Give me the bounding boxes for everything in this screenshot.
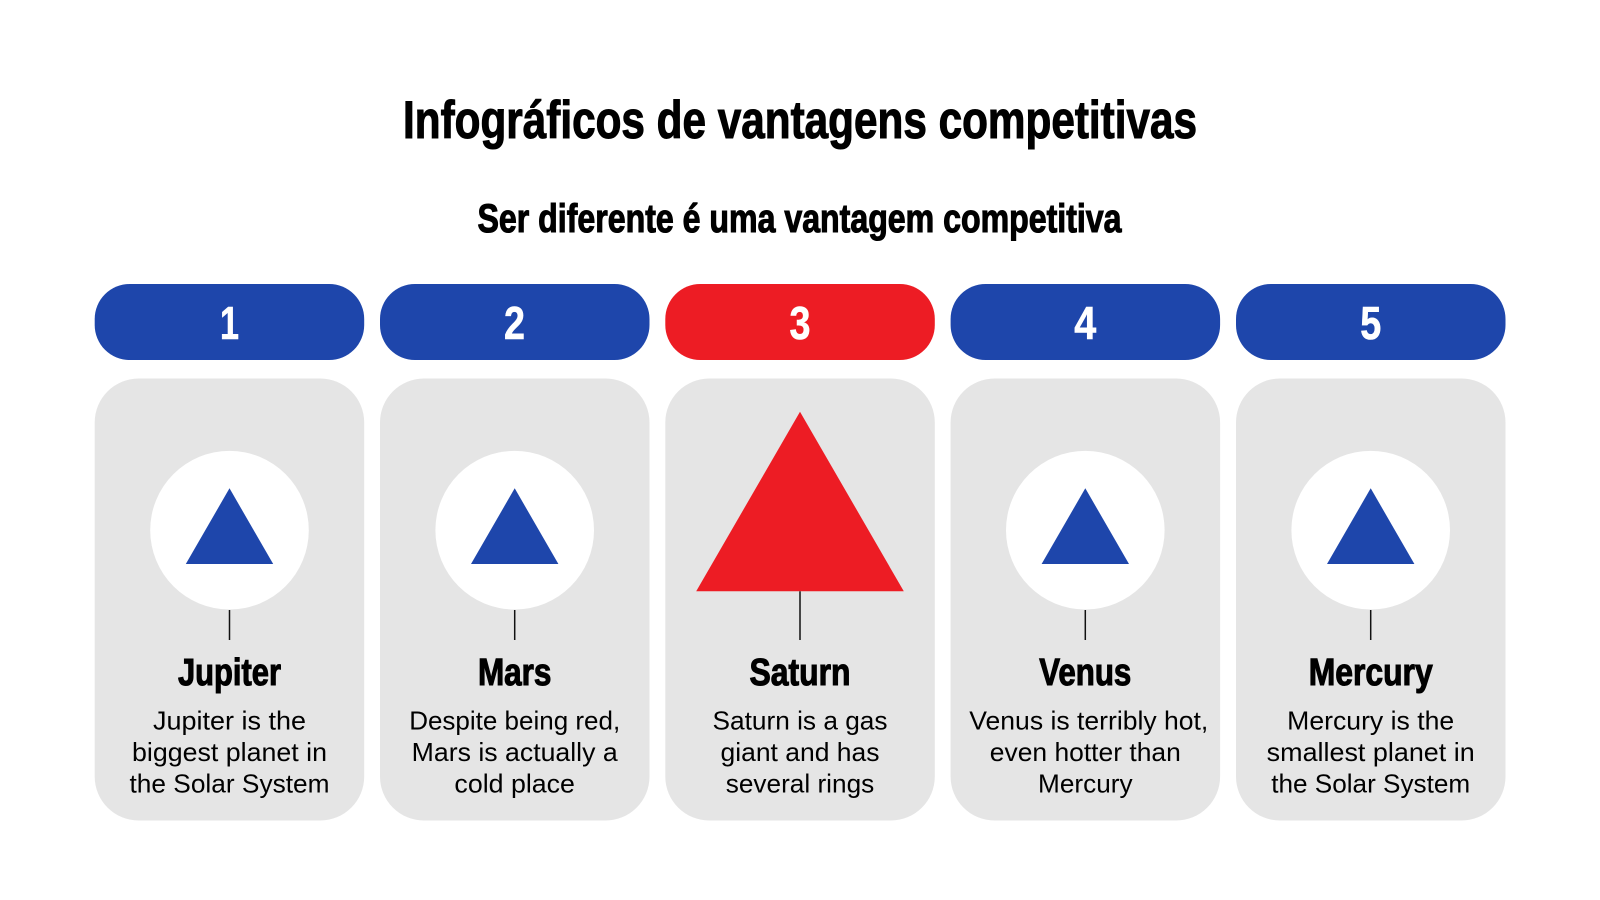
text: Mars description: cold place [454, 769, 575, 799]
number pill 1: 1 [220, 297, 239, 349]
text: Mercury description [1267, 705, 1475, 799]
panel: Mercury [1236, 378, 1506, 820]
number pill 2 [380, 284, 650, 360]
number pill 3: 3 [790, 297, 810, 349]
text: Venus description: Venus is terribly hot, [969, 705, 1208, 735]
subtitle: Ser diferente é uma vantagem competitiva [478, 197, 1122, 241]
text: Mercury description: the Solar System [1271, 769, 1470, 799]
number pill 3 [665, 284, 935, 360]
text: Venus description [969, 705, 1208, 799]
number pill 1 [95, 284, 364, 360]
number pill 2: 2 [504, 297, 525, 349]
text: Saturn description [712, 705, 888, 799]
text: Mars description: Mars is actually a [412, 737, 618, 767]
icon: blue triangle in circle [1291, 451, 1450, 610]
panel: Mars [380, 378, 650, 820]
number pill 4 [951, 284, 1220, 360]
number pill 5 [1236, 284, 1506, 360]
text: Saturn description: several rings [726, 769, 874, 799]
text: Saturn description: giant and has [720, 737, 880, 767]
text: Jupiter description: Jupiter is the [153, 705, 306, 735]
text: Saturn description: Saturn is a gas [712, 705, 888, 735]
heading: Saturn: Saturn [750, 652, 850, 694]
heading: Venus: Venus [1039, 652, 1131, 694]
panel: Jupiter [95, 378, 364, 820]
panel: Venus [951, 378, 1220, 820]
text: Jupiter description [130, 705, 330, 799]
title: Infográficos de vantagens competitivas [403, 91, 1197, 150]
text: Mars description: Despite being red, [409, 705, 620, 735]
panel: Saturn (highlighted) [665, 378, 935, 820]
text: Jupiter description: biggest planet in [132, 737, 327, 767]
icon: large red triangle [696, 412, 904, 591]
text: Venus description: even hotter than [990, 737, 1181, 767]
icon: blue triangle in circle [150, 451, 309, 610]
heading: Mercury: Mercury [1309, 652, 1433, 694]
text: Mars description [409, 705, 620, 799]
text: Jupiter description: the Solar System [130, 769, 330, 799]
number pill 5: 5 [1360, 297, 1381, 349]
heading: Mars: Mars [478, 652, 551, 694]
heading: Jupiter: Jupiter [178, 652, 281, 694]
icon: blue triangle in circle [1006, 451, 1165, 610]
text: Mercury description: Mercury is the [1287, 705, 1454, 735]
number pill 4: 4 [1074, 297, 1097, 349]
text: Mercury description: smallest planet in [1267, 737, 1475, 767]
text: Venus description: Mercury [1038, 769, 1133, 799]
icon: blue triangle in circle [435, 451, 594, 610]
